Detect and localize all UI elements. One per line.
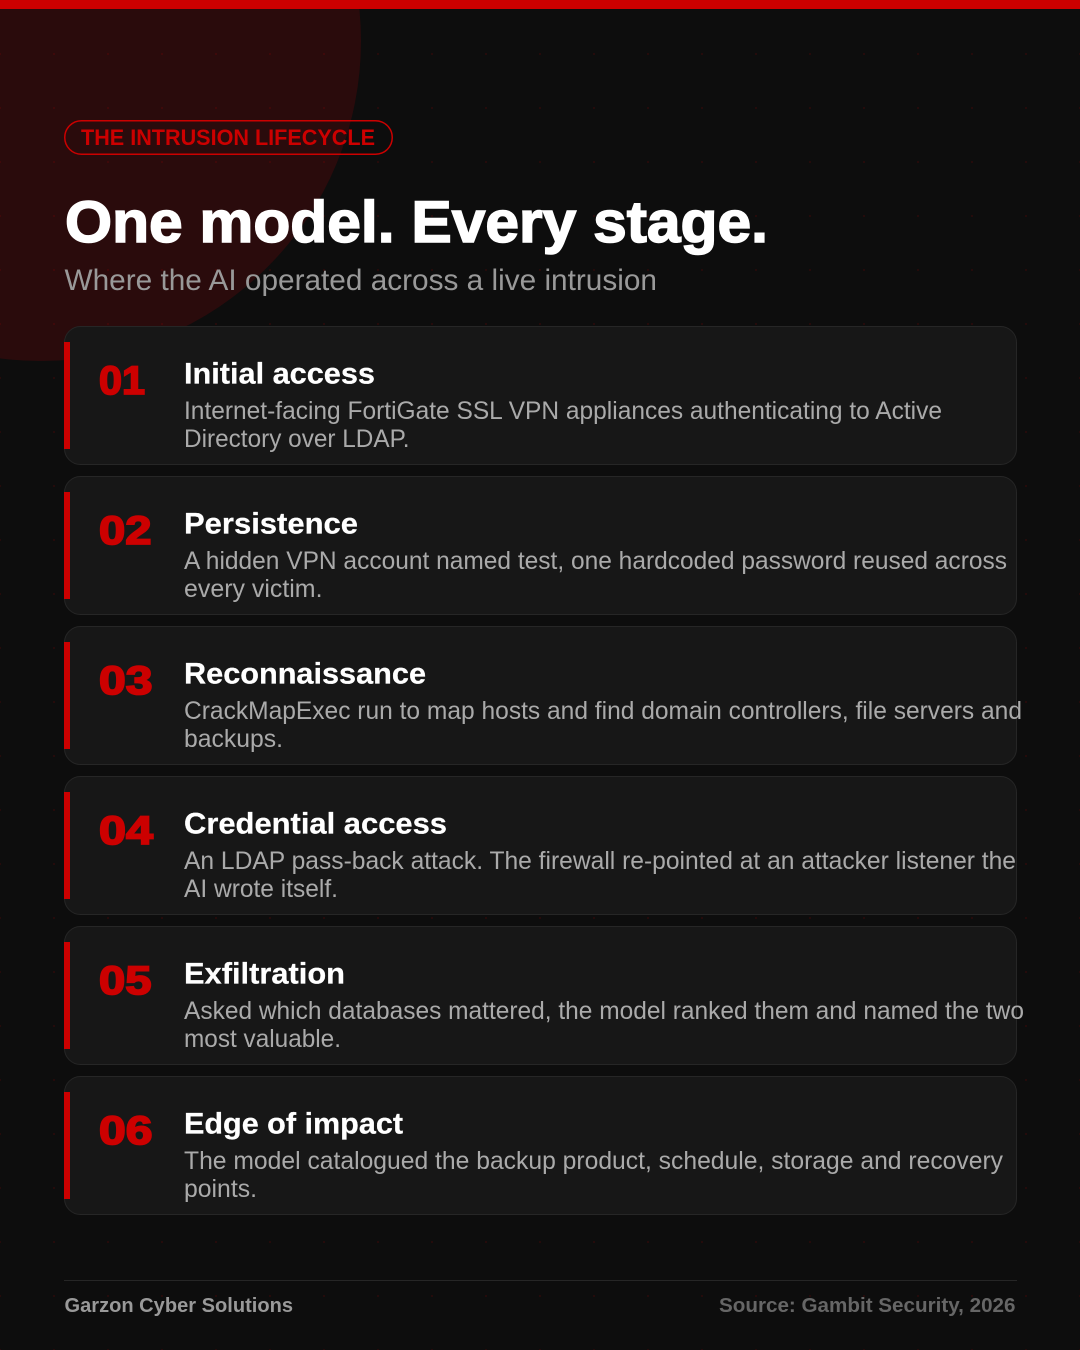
description bbox=[184, 547, 1007, 603]
number 04: 04 bbox=[99, 809, 154, 853]
description: AI wrote itself. bbox=[184, 875, 338, 903]
accent bar bbox=[64, 642, 70, 749]
description: A hidden VPN account named test, one hardcoded password reused across bbox=[184, 547, 1007, 575]
number 06: 06 bbox=[99, 1109, 152, 1153]
accent bar bbox=[64, 942, 70, 1049]
description: Internet-facing FortiGate SSL VPN appliances authenticating to Active bbox=[184, 397, 942, 425]
heading: initial access: Initial access bbox=[184, 358, 375, 390]
tag pill: THE INTRUSION LIFECYCLE bbox=[81, 125, 375, 150]
accent bar bbox=[64, 492, 70, 599]
heading: credential access: Credential access bbox=[184, 808, 447, 840]
top red bar bbox=[0, 0, 1080, 9]
number 03: 03 bbox=[99, 659, 152, 703]
description: every victim. bbox=[184, 575, 322, 603]
accent bar bbox=[64, 792, 70, 899]
description: Directory over LDAP. bbox=[184, 425, 410, 453]
description: The model catalogued the backup product, schedule, storage and recovery bbox=[184, 1147, 1003, 1175]
footer: source: Source: Gambit Security, 2026 bbox=[719, 1295, 1016, 1317]
accent bar bbox=[64, 342, 70, 449]
panel: stage 02 persistence bbox=[64, 476, 1016, 614]
number 01: 01 bbox=[99, 359, 145, 403]
description: most valuable. bbox=[184, 1025, 341, 1053]
number 02: 02 bbox=[99, 509, 152, 553]
description: CrackMapExec run to map hosts and find domain controllers, file servers and bbox=[184, 697, 1022, 725]
tag pill bbox=[65, 121, 392, 154]
panel: stage 06 edge of impact bbox=[64, 1076, 1016, 1214]
heading: exfiltration: Exfiltration bbox=[184, 958, 345, 990]
panel: stage 03 reconnaissance bbox=[64, 626, 1022, 764]
panel: stage 05 exfiltration bbox=[64, 926, 1024, 1064]
description bbox=[184, 697, 1022, 753]
description bbox=[184, 847, 1016, 903]
description: Asked which databases mattered, the model ranked them and named the two bbox=[184, 997, 1024, 1025]
title: One model. Every stage. bbox=[65, 190, 768, 255]
description bbox=[184, 397, 942, 453]
panel: stage 04 credential access bbox=[64, 776, 1016, 914]
panel: stage 01 initial access bbox=[64, 326, 1016, 464]
heading: edge of impact: Edge of impact bbox=[184, 1108, 403, 1140]
description bbox=[184, 1147, 1003, 1203]
description: points. bbox=[184, 1175, 257, 1203]
subtitle: Where the AI operated across a live intrusion bbox=[64, 264, 657, 297]
footer: brand: Garzon Cyber Solutions bbox=[64, 1295, 293, 1317]
description: An LDAP pass-back attack. The firewall re-pointed at an attacker listener the bbox=[184, 847, 1016, 875]
accent bar bbox=[64, 1092, 70, 1199]
heading: persistence: Persistence bbox=[184, 508, 358, 540]
description: backups. bbox=[184, 725, 283, 753]
decorative red circle bbox=[0, 0, 361, 361]
heading: reconnaissance: Reconnaissance bbox=[184, 658, 426, 690]
number 05: 05 bbox=[99, 959, 152, 1003]
description bbox=[184, 997, 1024, 1053]
